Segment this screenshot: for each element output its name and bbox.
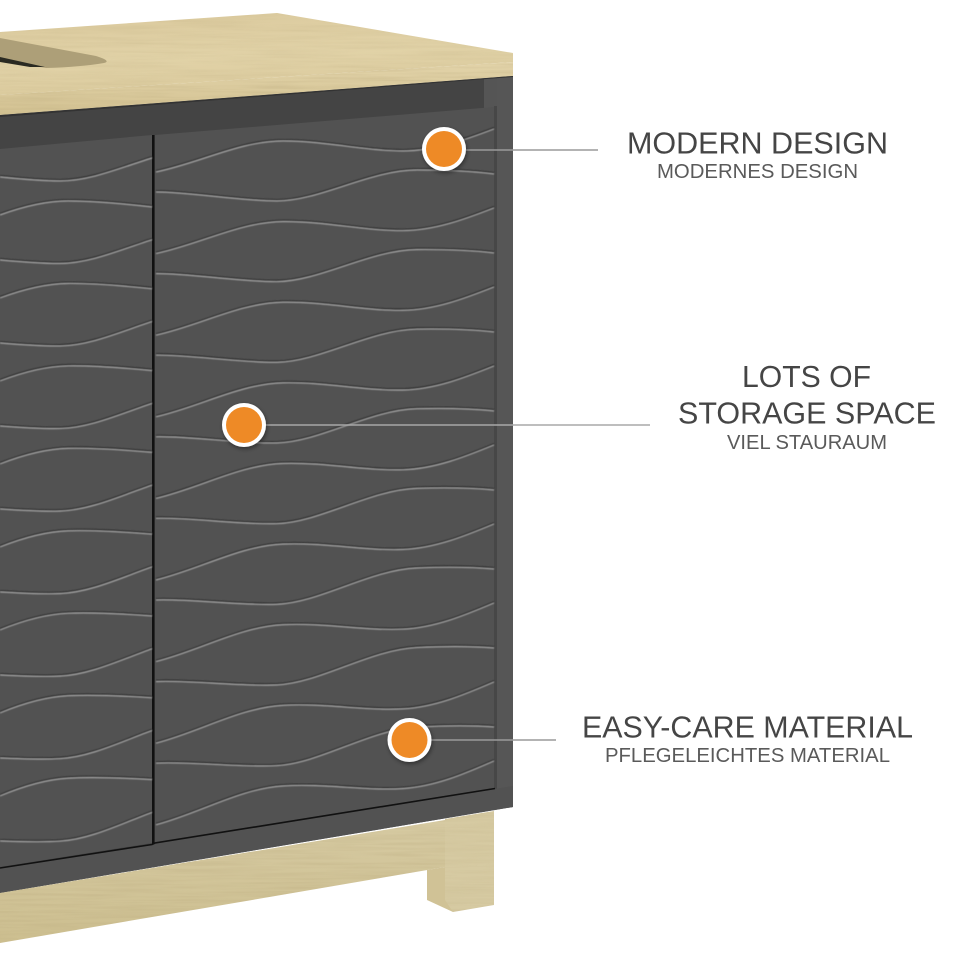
heading: MODERN DESIGN [627, 126, 888, 160]
inner corner shade [484, 78, 497, 108]
cabinet body [0, 76, 513, 893]
wave pattern: left door [0, 157, 152, 845]
cabinet illustration [0, 13, 513, 943]
leader line [431, 739, 556, 741]
heading [678, 360, 936, 430]
door gap [152, 135, 154, 845]
callout: easy-care material [388, 710, 913, 767]
bottom rail [0, 786, 513, 893]
wooden countertop [0, 13, 513, 117]
door bottom shadow line [0, 788, 495, 868]
leader line [466, 149, 598, 151]
sink cut-out [0, 38, 107, 68]
wooden plinth [0, 820, 445, 943]
leader line [266, 424, 650, 426]
German subheading: PFLEGELEICHTES MATERIAL [605, 744, 890, 767]
orange marker [222, 403, 266, 447]
German subheading: VIEL STAURAUM [727, 431, 887, 454]
side panel [497, 76, 513, 809]
left door [0, 135, 152, 867]
orange marker [422, 127, 466, 171]
wave pattern: right door [156, 128, 494, 825]
heading: EASY-CARE MATERIAL [582, 710, 913, 744]
heading: STORAGE SPACE [678, 396, 936, 430]
callout: storage space [222, 360, 936, 454]
German subheading: MODERNES DESIGN [657, 160, 858, 183]
callout: modern design [422, 126, 888, 183]
heading: LOTS OF [742, 360, 871, 394]
orange marker [388, 718, 432, 762]
right door [155, 107, 494, 842]
wooden leg [427, 811, 494, 912]
